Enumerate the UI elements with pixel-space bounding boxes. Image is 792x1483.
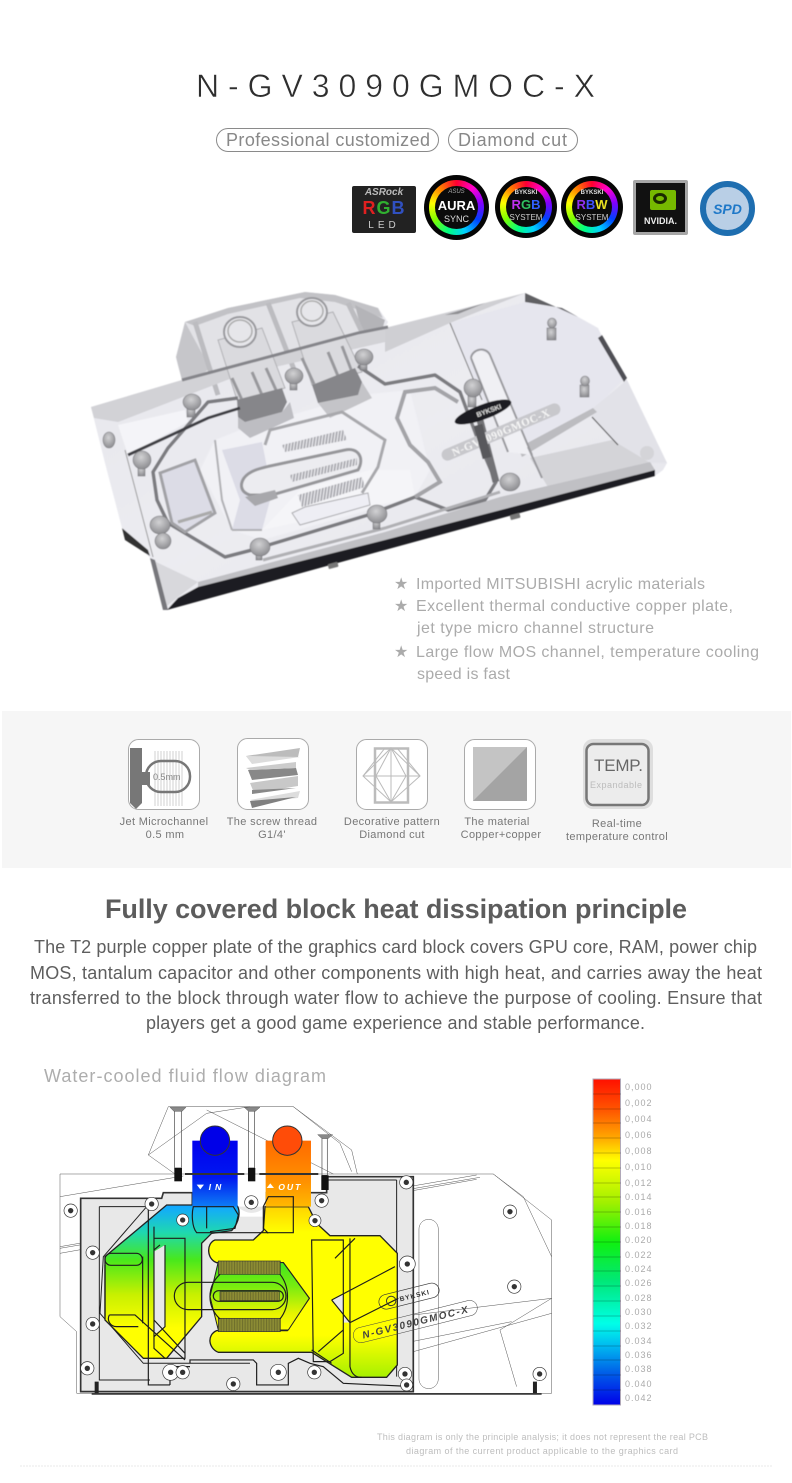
- upper bracket facets: [178, 292, 385, 380]
- logo: BYKSKI RGB SYSTEM: SYSTEM: [510, 213, 542, 222]
- main chamber: [209, 1207, 397, 1377]
- legend values: 0.028: [625, 1293, 653, 1303]
- logo: ASRock RGB LED: ASRock: [365, 187, 403, 198]
- legend values: 0.024: [625, 1264, 653, 1274]
- legend values: 0.026: [625, 1278, 653, 1288]
- bar band: [91, 328, 385, 422]
- wedge: [332, 1293, 350, 1323]
- logo badge: BYKSKI: [476, 404, 503, 419]
- product photo: transparent water block: [91, 292, 667, 610]
- colour legend: [593, 1079, 653, 1405]
- legend values: 0.018: [625, 1221, 653, 1231]
- logo: SPD: SPD: [713, 201, 742, 217]
- icon captions: [120, 816, 668, 843]
- mounting screws: [103, 318, 590, 560]
- icon captions: Jet Microchannel: [120, 816, 208, 828]
- port fittings: [224, 298, 327, 347]
- IN label: [197, 1182, 222, 1192]
- IN label: IN: [209, 1182, 222, 1192]
- icon captions: Real-time: [592, 818, 642, 830]
- left chamber: [105, 1205, 239, 1358]
- legend values: 0.042: [625, 1393, 653, 1403]
- feature list: Excellent thermal conductive copper plate,: [416, 598, 733, 615]
- logo: NVIDIA: [633, 180, 688, 235]
- logo: BYKSKI RGB SYSTEM: RGB: [512, 197, 540, 212]
- legend values: 0.040: [625, 1379, 653, 1389]
- icon: jet microchannel: [128, 740, 200, 810]
- flow diagram title: Water-cooled fluid flow diagram: [44, 1066, 326, 1086]
- icon: copper material: [464, 740, 536, 810]
- icon: temperature: TEMP.: [594, 756, 643, 775]
- port circles: [200, 1126, 230, 1155]
- fastening bolts: [92, 1107, 542, 1394]
- logo: BYKSKI RBW SYSTEM: SYSTEM: [576, 213, 608, 222]
- legend values: 0,012: [625, 1178, 653, 1188]
- white strip: [154, 1245, 165, 1335]
- title: N-GV3090GMOC-X: [196, 68, 595, 104]
- bottom edge: [198, 462, 655, 587]
- logo plate: BYKSKI: [399, 1289, 430, 1303]
- logo: SPD: [700, 181, 755, 236]
- outlet column: [266, 1141, 311, 1207]
- icon captions: temperature control: [566, 831, 668, 843]
- legend values: 0.036: [625, 1350, 653, 1360]
- upper fins: [282, 430, 347, 452]
- icon captions: Copper+copper: [461, 829, 541, 841]
- legend values: 0,006: [625, 1130, 653, 1140]
- OUT label: OUT: [278, 1182, 301, 1192]
- OUT label: [267, 1182, 301, 1192]
- feature list: ★: [394, 644, 408, 661]
- plate outline: [265, 412, 385, 493]
- outer card outline: [60, 1107, 552, 1393]
- legend values: 0.030: [625, 1307, 653, 1317]
- logo: BYKSKI RBW SYSTEM: BYKSKI: [581, 190, 603, 196]
- legend values: [625, 1082, 653, 1403]
- block body: [91, 292, 667, 610]
- compatibility logos: [352, 175, 755, 240]
- legend values: 0.034: [625, 1336, 653, 1346]
- logo badge: [452, 395, 514, 429]
- logo: ASRock RGB LED: [352, 186, 416, 233]
- heading: Fully covered block heat dissipation principle: [105, 894, 687, 924]
- middle fins: [290, 458, 357, 482]
- legend values: 0.016: [625, 1207, 653, 1217]
- legend values: 0,004: [625, 1114, 653, 1124]
- feature list: [394, 576, 759, 683]
- feature list: speed is fast: [417, 666, 511, 683]
- description paragraph: transferred to the block through water flow to achieve the purpose of cooling. Ensure that: [30, 988, 762, 1008]
- icon: jet microchannel: 0.5mm: [153, 772, 181, 782]
- legend values: 0,000: [625, 1082, 653, 1092]
- nameplate: N-GV3090GMOC-X: [450, 407, 552, 459]
- channel outline: [153, 366, 496, 557]
- fins: [218, 1261, 280, 1274]
- logo: NVIDIA: NVIDIA.: [644, 216, 677, 226]
- plate screws and outer screws: [64, 1176, 546, 1391]
- logo: ASUS AURA SYNC: AURA: [438, 198, 475, 213]
- slot: [471, 349, 532, 455]
- feature list: Large flow MOS channel, temperature cooling: [416, 644, 759, 661]
- port bodies: [218, 312, 372, 438]
- description paragraph: players get a good game experience and stable performance.: [146, 1013, 645, 1033]
- logo: ASUS AURA SYNC: [424, 175, 489, 240]
- flow diagram: [60, 1107, 552, 1394]
- icon captions: The screw thread: [227, 816, 317, 828]
- model plate: [352, 1299, 479, 1344]
- feature list: Imported MITSUBISHI acrylic materials: [416, 576, 705, 593]
- icon captions: Decorative pattern: [344, 816, 440, 828]
- feature list: ★: [394, 598, 408, 615]
- legend values: 0.032: [625, 1321, 653, 1331]
- disclaimer note: This diagram is only the principle analysis; it does not represent the real PCB: [377, 1432, 708, 1442]
- centre chamber: [210, 1262, 309, 1330]
- logo: ASRock RGB LED: LED: [368, 220, 400, 231]
- legend values: 0.014: [625, 1192, 653, 1202]
- overlay lines: [105, 1197, 413, 1387]
- model plate: N-GV3090GMOC-X: [361, 1304, 470, 1342]
- disclaimer note: diagram of the current product applicable to the graphics card: [406, 1446, 678, 1456]
- inner copper plate region: [200, 390, 430, 540]
- icon: diamond cut: [356, 740, 428, 810]
- icon captions: The material: [464, 816, 530, 828]
- right panel: [450, 302, 623, 445]
- icon: screw thread: [238, 738, 308, 810]
- legend values: 0.038: [625, 1364, 653, 1374]
- description paragraph: The T2 purple copper plate of the graphics card block covers GPU core, RAM, power chip: [34, 937, 757, 957]
- icon captions: 0.5 mm: [146, 829, 184, 841]
- logo: ASUS AURA SYNC: SYNC: [444, 214, 469, 224]
- feature list: ★: [394, 576, 408, 593]
- side chamber: [160, 460, 215, 532]
- legend values: 0.022: [625, 1250, 653, 1260]
- lower fins: [298, 477, 365, 507]
- logo: ASRock RGB LED: RGB: [362, 198, 406, 218]
- logo: ASUS AURA SYNC: ASUS: [448, 189, 465, 195]
- logo plate: [377, 1282, 441, 1311]
- logo: BYKSKI RGB SYSTEM: [495, 176, 557, 238]
- icon captions: Diamond cut: [359, 829, 425, 841]
- logo: BYKSKI RBW SYSTEM: [561, 176, 623, 238]
- legend values: 0,008: [625, 1146, 653, 1156]
- logo: BYKSKI RGB SYSTEM: BYKSKI: [515, 190, 537, 196]
- tag: Professional customized: Professional customized: [226, 130, 430, 150]
- tag: Diamond cut: Diamond cut: [458, 130, 567, 150]
- legend values: 0,010: [625, 1162, 653, 1172]
- description paragraph: MOS, tantalum capacitor and other components with high heat, and carries away the heat: [30, 963, 762, 983]
- centre slot: [242, 450, 361, 495]
- icon: temperature: [583, 739, 653, 809]
- disclaimer note: [377, 1432, 708, 1456]
- grey plate: [81, 1177, 413, 1392]
- legend values: 0,002: [625, 1098, 653, 1108]
- description paragraph: [30, 937, 762, 1033]
- legend values: 0.020: [625, 1235, 653, 1245]
- feature list: jet type micro channel structure: [416, 620, 654, 637]
- lower slot: [292, 493, 370, 525]
- icon captions: G1/4': [258, 829, 286, 841]
- nameplate: [440, 401, 563, 463]
- feature panel: [2, 711, 791, 868]
- inlet column: [192, 1141, 238, 1207]
- logo: BYKSKI RBW SYSTEM: RBW: [576, 197, 608, 212]
- icon: temperature: Expandable: [590, 780, 642, 790]
